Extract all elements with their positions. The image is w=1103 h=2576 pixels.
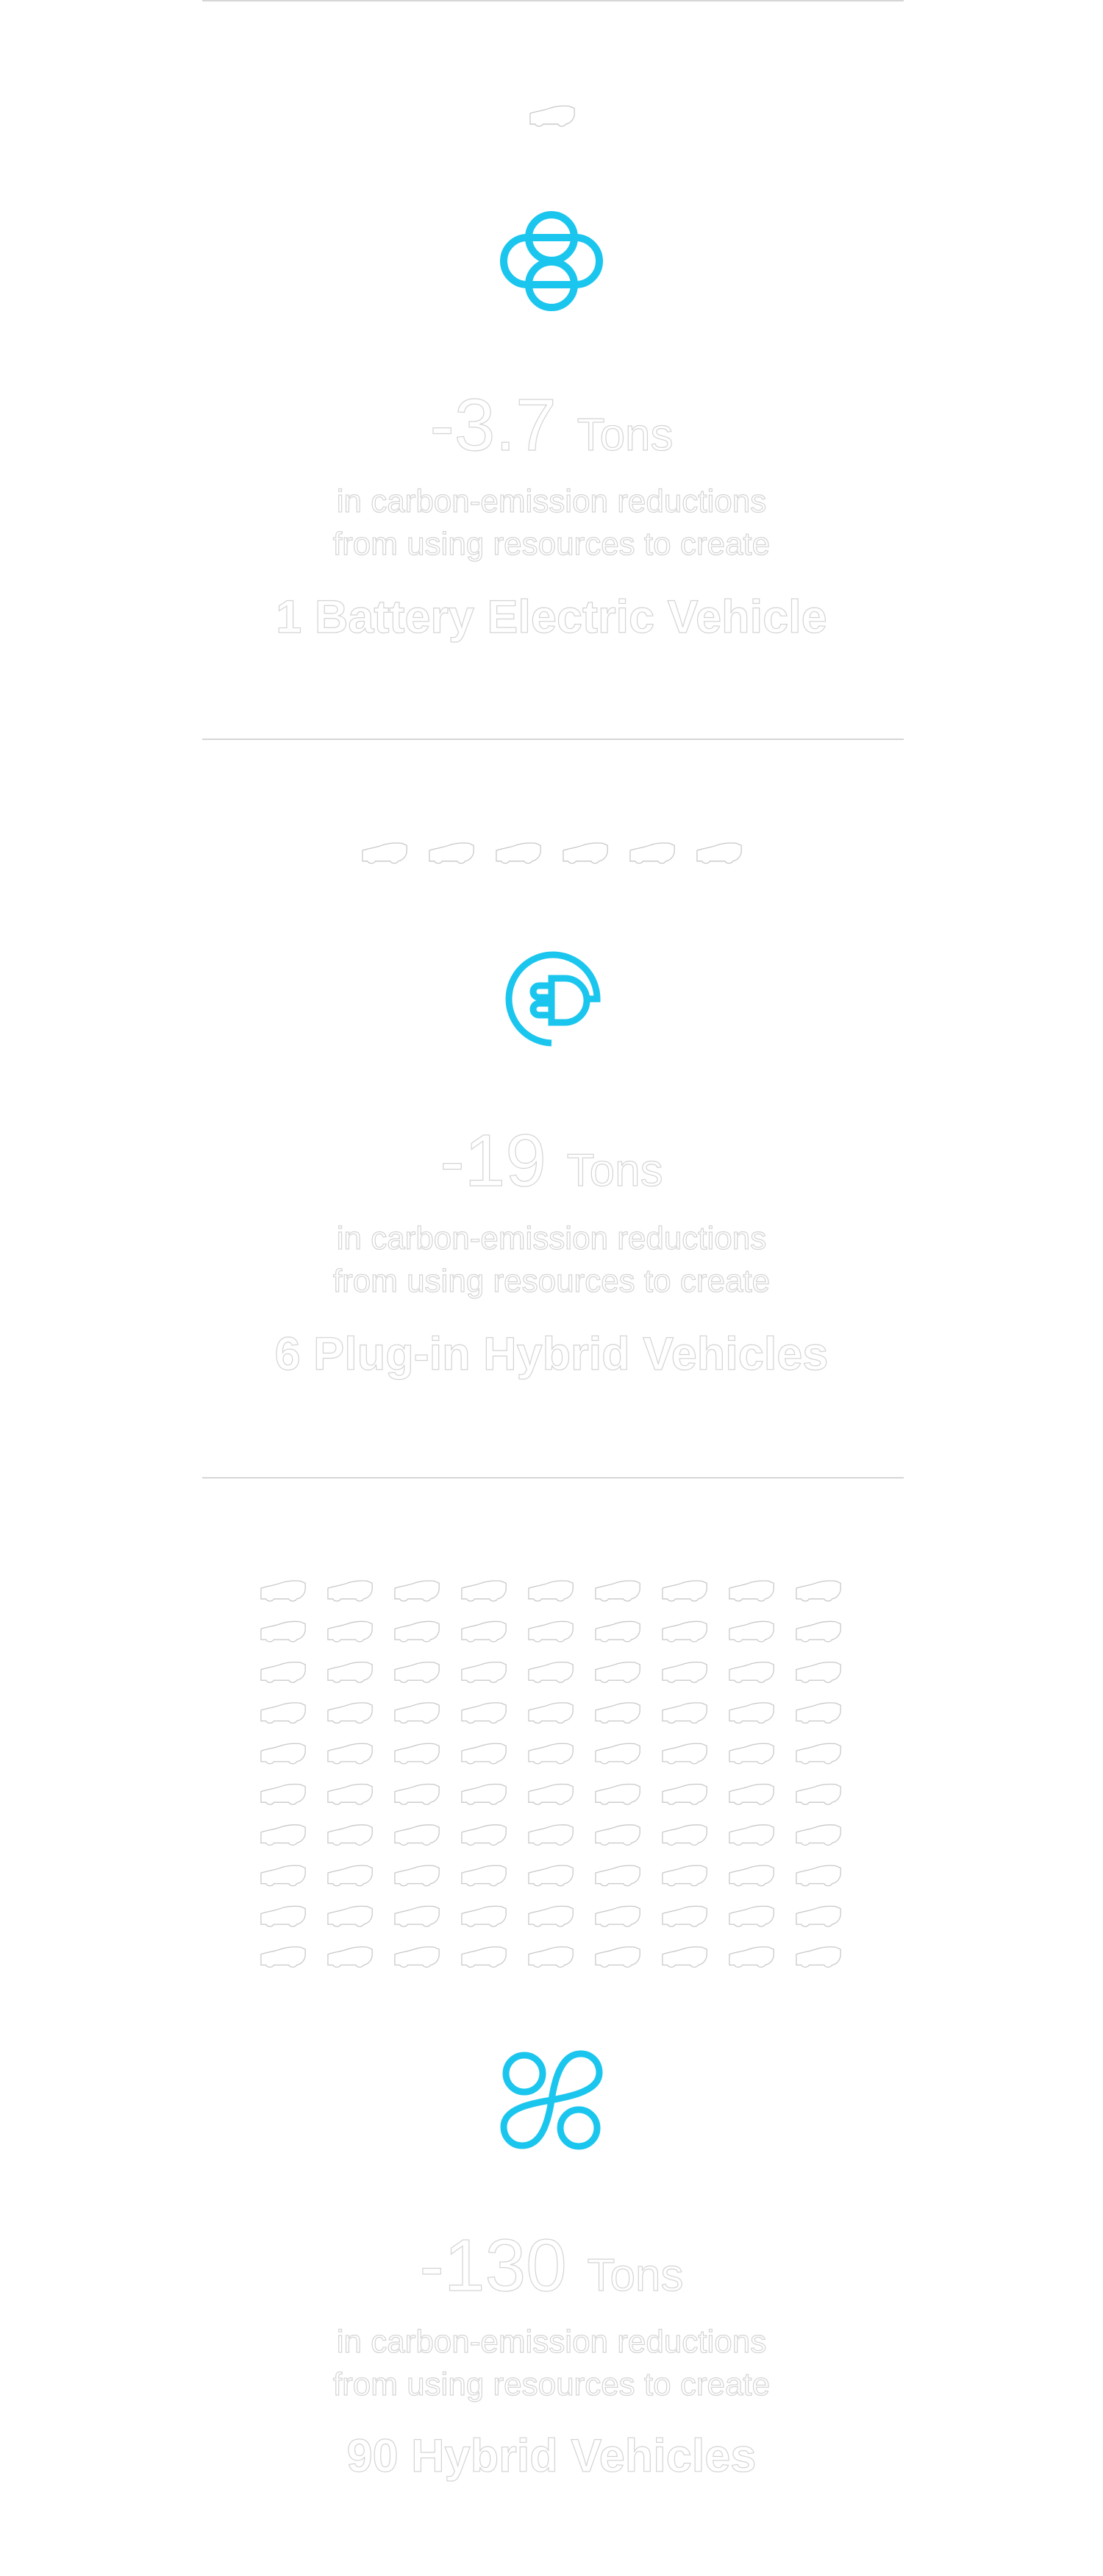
text: description: from using resources to create — [333, 2366, 770, 2402]
text: description: in carbon-emission reductions — [337, 2324, 766, 2360]
icon grid: 90 cars — [260, 1580, 841, 1968]
icon: single car — [529, 105, 575, 127]
stat: -19 Tons: -19 Tons — [440, 1120, 663, 1202]
text: description: in carbon-emission reductions — [337, 1220, 766, 1256]
section 1: battery electric vehicle — [276, 105, 827, 643]
heading: 90 Hybrid Vehicles: 90 Hybrid Vehicles — [347, 2430, 756, 2482]
heading: 6 Plug-in Hybrid Vehicles: 6 Plug-in Hybrid Vehicles — [275, 1328, 828, 1380]
icon: hybrid loop — [500, 2051, 603, 2149]
text: description — [332, 483, 770, 562]
text: description: from using resources to create — [333, 1263, 770, 1299]
icon: plug — [506, 952, 600, 1046]
icon: battery electric (circles) — [500, 211, 603, 311]
text: description — [332, 1220, 770, 1299]
icon row: 6 cars — [362, 842, 742, 864]
section 2: plug-in hybrid — [275, 842, 828, 1380]
heading: 1 Battery Electric Vehicle: 1 Battery Electric Vehicle — [276, 591, 827, 643]
stat: -130 Tons: -130 Tons — [420, 2224, 683, 2307]
stat: -3.7 Tons: -3.7 Tons — [429, 384, 674, 466]
text: description — [332, 2324, 770, 2402]
text: description: in carbon-emission reductions — [337, 483, 766, 519]
section 3: hybrid — [260, 1580, 841, 2482]
text: description: from using resources to create — [333, 526, 770, 562]
